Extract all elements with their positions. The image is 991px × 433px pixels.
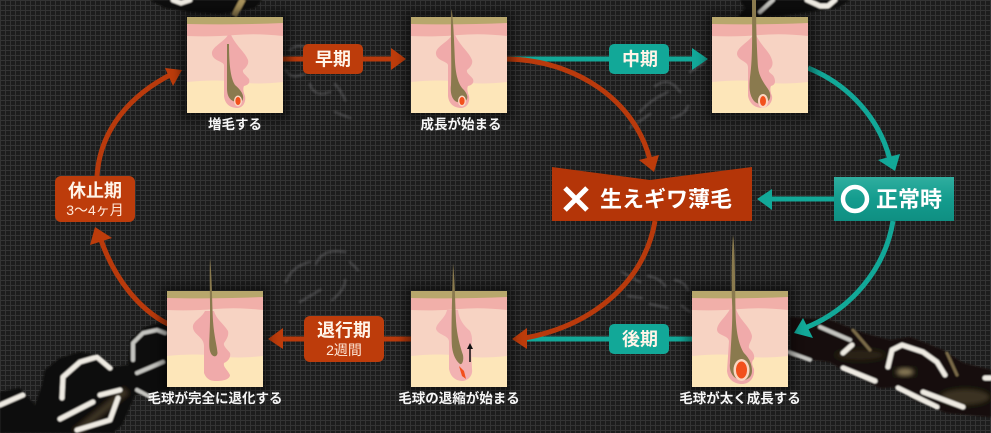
label: regression stage: 2週間	[326, 342, 362, 358]
card: bulb begins to shrink	[405, 263, 513, 393]
label: early stage	[303, 44, 363, 74]
label: middle stage	[609, 44, 669, 74]
arrow: late stage	[525, 336, 692, 342]
chain: bottom right	[788, 317, 991, 417]
caption: hair growth: 増毛する	[208, 116, 262, 132]
panel: normal	[834, 177, 954, 221]
card: growth starts	[405, 9, 513, 119]
arrow: normal to thinning	[757, 189, 834, 210]
chain: top left	[150, 0, 262, 16]
icon: cross	[565, 188, 587, 210]
caption: bulb begins to shrink: 毛球の退縮が始まる	[398, 390, 520, 406]
label: late stage	[609, 324, 669, 354]
caption: growth starts: 成長が始まる	[420, 116, 502, 132]
panel: thinning hairline	[552, 167, 752, 221]
caption: bulb fully regressed: 毛球が完全に退化する	[148, 390, 282, 406]
arrow: middle stage	[507, 48, 708, 70]
card: hair growth	[181, 11, 289, 119]
icon: circle	[843, 187, 867, 211]
chain: bottom left	[0, 323, 170, 433]
chain: faint middle links	[286, 46, 705, 312]
label: middle stage: 中期	[622, 50, 658, 70]
arrow: teal arc into normal box	[808, 68, 900, 171]
label: rest stage: 3〜4ヶ月	[66, 202, 124, 218]
arrow: regression stage	[268, 328, 411, 349]
icon: small up arrow	[467, 343, 473, 362]
card: mid growth	[706, 0, 814, 119]
label: regression stage: 退行期	[317, 320, 371, 340]
label: regression stage	[304, 316, 384, 362]
arrow: red arc from thinning box to regression card	[512, 221, 655, 349]
panel: thinning hairline: 生えギワ薄毛	[600, 187, 732, 212]
arrow: teal arc to late stage	[794, 221, 893, 338]
label: rest stage: 休止期	[68, 181, 122, 201]
label: early stage: 早期	[315, 50, 351, 70]
arrow: rest to early (up-left arc)	[97, 68, 182, 176]
arrow: red arc into thinning box	[507, 59, 659, 172]
label: rest stage	[55, 176, 135, 222]
panel: normal: 正常時	[876, 187, 942, 212]
chain: top right	[738, 0, 850, 17]
arrow: early stage	[283, 48, 406, 70]
card: bulb grows thick	[686, 235, 794, 393]
arrow: regression to rest (lower-left arc)	[90, 227, 168, 324]
caption: bulb grows thick: 毛球が太く成長する	[679, 390, 801, 406]
card: bulb fully regressed	[161, 258, 269, 393]
label: late stage: 後期	[622, 330, 658, 350]
